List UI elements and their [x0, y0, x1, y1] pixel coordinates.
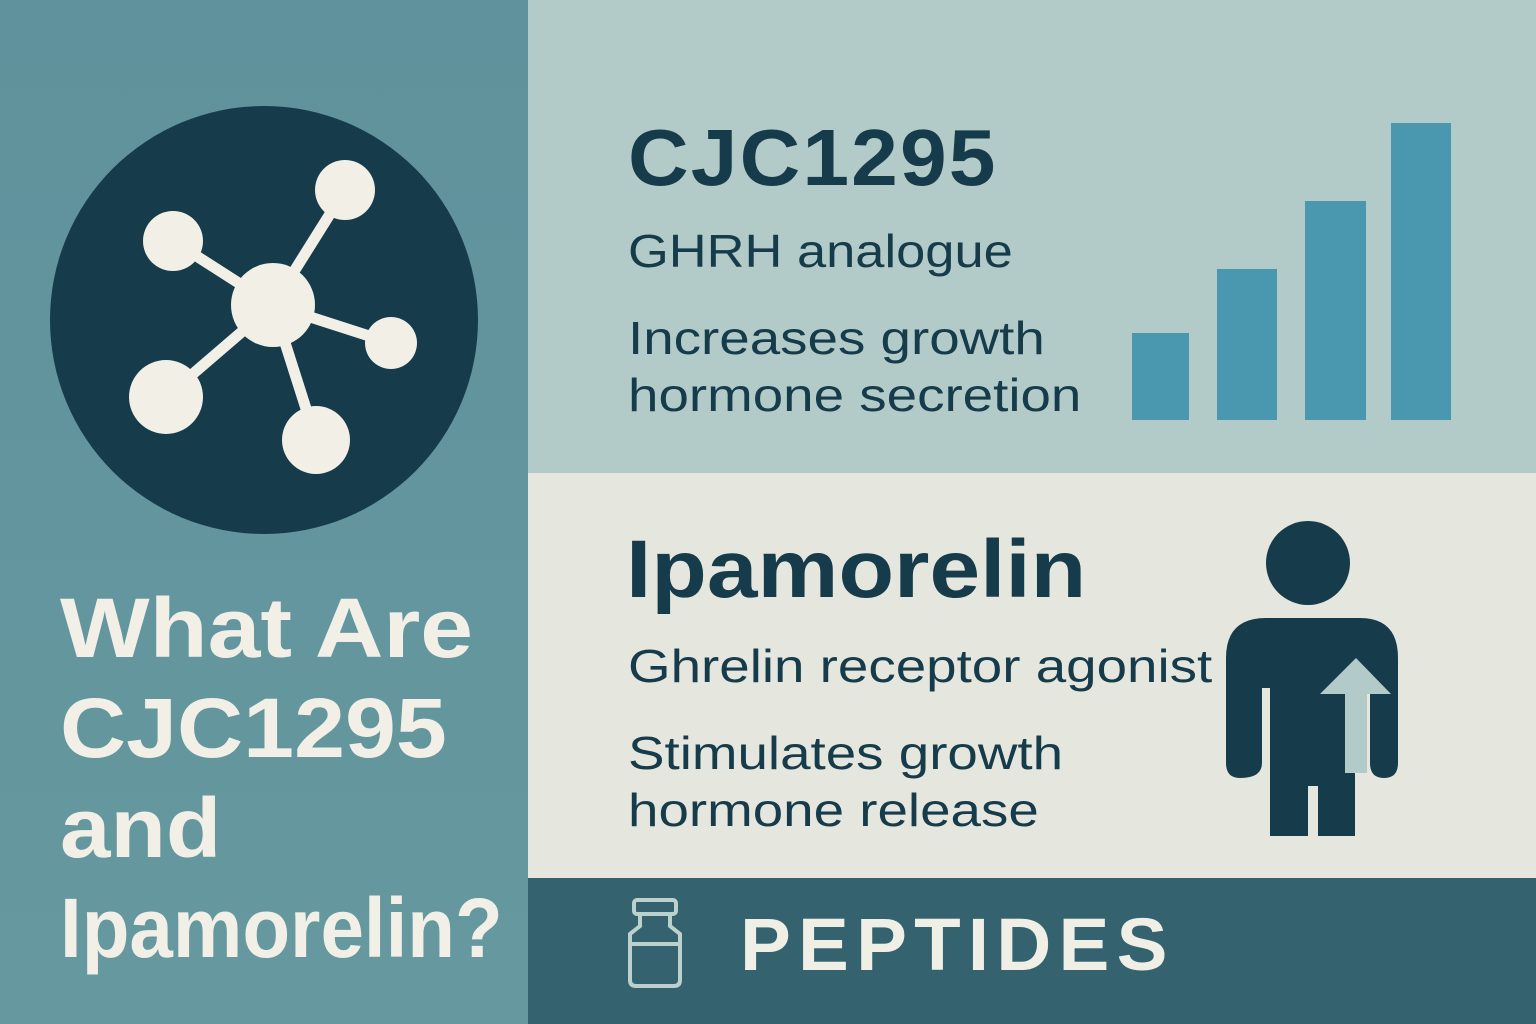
text: Ghrelin receptor agonist: Ghrelin receptor agonist — [628, 640, 1212, 692]
panel: CJC1295 — [528, 0, 1536, 473]
label: PEPTIDES: PEPTIDES — [740, 903, 1175, 986]
panel: left — [0, 0, 528, 1024]
title: What Are — [60, 581, 473, 675]
icon: person with arrow — [1226, 521, 1398, 836]
text: description: hormone secretion — [628, 369, 1081, 421]
title: Ipamorelin? — [60, 881, 503, 975]
text: description — [628, 727, 1063, 836]
title: CJC1295 — [60, 681, 447, 775]
text: description: hormone release — [628, 784, 1039, 836]
bar chart — [1132, 123, 1451, 420]
icon: molecule circle — [50, 106, 478, 534]
text: description — [628, 312, 1081, 421]
heading: Ipamorelin: Ipamorelin — [626, 524, 1086, 615]
heading: CJC1295: CJC1295 — [628, 113, 998, 202]
text: description: Increases growth — [628, 312, 1045, 364]
panel: Ipamorelin — [528, 473, 1536, 878]
title — [60, 581, 503, 975]
panel: bottom bar — [528, 878, 1536, 1024]
title: and — [60, 781, 221, 875]
text: GHRH analogue: GHRH analogue — [628, 225, 1013, 277]
icon: vial — [628, 898, 682, 988]
text: description: Stimulates growth — [628, 727, 1063, 779]
